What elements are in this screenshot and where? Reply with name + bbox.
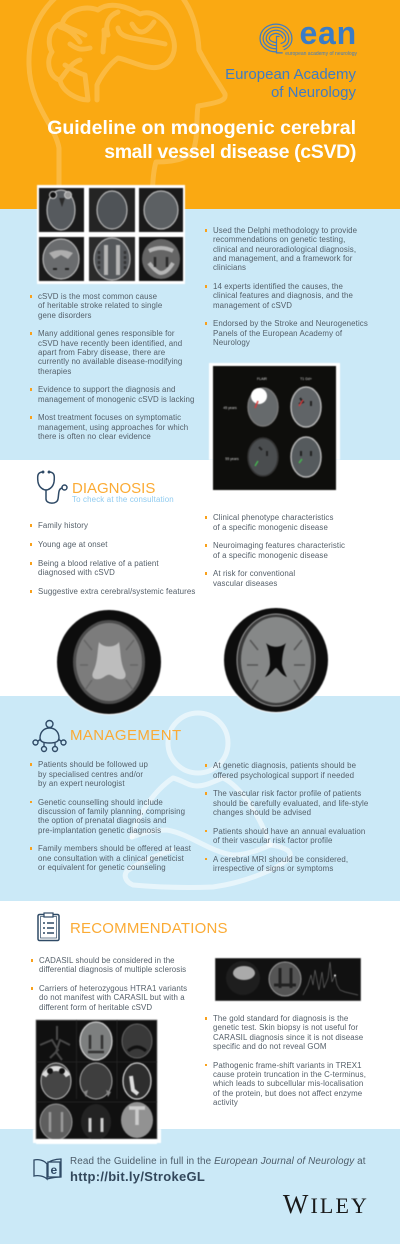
icon: stethoscope bbox=[36, 470, 68, 504]
bullet text: At genetic diagnosis, patients should be bbox=[213, 761, 356, 770]
bullet text: cSVD is the most common cause bbox=[38, 292, 157, 301]
management bullets left bbox=[30, 760, 191, 872]
management band bbox=[0, 696, 400, 901]
bullet text: cause protein truncation in the C-terminus, bbox=[213, 1070, 366, 1079]
bullet text: specific and do not reveal GOM bbox=[213, 1042, 327, 1051]
bullet text: Patients should be followed up bbox=[38, 760, 148, 769]
bullet text: by specialised centres and/or bbox=[38, 770, 143, 779]
bullet text: Most treatment focuses on symptomatic bbox=[38, 413, 181, 422]
image: FLAIR and T1 scans by age: 55 years bbox=[225, 457, 239, 461]
image: nine panel MRI grid bbox=[32, 1019, 162, 1144]
bullet text: irrespective of signs or symptoms bbox=[213, 864, 333, 873]
bullet text bbox=[213, 226, 357, 273]
bullet text: Young age at onset bbox=[38, 540, 108, 549]
bullet text bbox=[213, 1061, 366, 1107]
bullet text bbox=[38, 385, 195, 404]
bullet text: activity bbox=[213, 1098, 238, 1107]
organisation name bbox=[225, 66, 356, 100]
bullet text: Being a blood relative of a patient bbox=[38, 559, 159, 568]
bullet text: by an expert neurologist bbox=[38, 779, 125, 788]
bullet text bbox=[38, 760, 148, 788]
bullet text bbox=[213, 541, 345, 560]
organisation name: European Academy bbox=[225, 66, 356, 83]
icon: open book with e: e bbox=[50, 1163, 58, 1177]
image: FLAIR and T1 scans by age bbox=[208, 362, 340, 491]
bullet text: Suggestive extra cerebral/systemic features bbox=[38, 587, 195, 596]
bullet text: Genetic counselling should include bbox=[38, 798, 163, 807]
bullet text bbox=[38, 329, 182, 376]
logo strapline: european academy of neurology bbox=[285, 51, 357, 57]
bullet text: 14 experts identified the causes, the bbox=[213, 282, 343, 291]
heading text: RECOMMENDATIONS bbox=[70, 920, 228, 936]
bullet text: recommendations on genetic testing, bbox=[213, 235, 345, 244]
heading text: DIAGNOSIS bbox=[72, 480, 155, 497]
bullet text: vascular diseases bbox=[213, 579, 277, 588]
bullet text: there is often no clear evidence bbox=[38, 432, 151, 441]
organisation name: of Neurology bbox=[271, 84, 356, 100]
bullet text: Family history bbox=[38, 521, 88, 530]
bullet text bbox=[213, 282, 353, 310]
bullet text bbox=[38, 292, 162, 320]
bullet text: do not manifest with CARASIL but with a bbox=[39, 993, 185, 1002]
logo: EAN bbox=[259, 15, 357, 57]
heading text: MANAGEMENT bbox=[70, 727, 182, 744]
bullet text bbox=[213, 1014, 363, 1051]
bullet text: which leads to subcellular mis-localisation bbox=[213, 1079, 363, 1088]
bullet text: clinical and neuroradiological diagnosis, bbox=[213, 245, 356, 254]
bullet text bbox=[213, 319, 368, 347]
bullet text: Family members should be offered at least bbox=[38, 844, 191, 853]
footer link bbox=[33, 1156, 366, 1184]
bullet text bbox=[213, 569, 295, 588]
bullet text: At risk for conventional bbox=[213, 569, 295, 578]
image: round T2 scan bbox=[56, 609, 162, 716]
bullet text: genetic test. Skin biopsy is not useful for bbox=[213, 1023, 358, 1032]
image: round FLAIR scan bbox=[223, 607, 329, 714]
bullet text: Endorsed by the Stroke and Neurogenetics bbox=[213, 319, 368, 328]
intro bullets left bbox=[30, 292, 195, 441]
bullet text: Patients should have an annual evaluation bbox=[213, 827, 365, 836]
bullet text: Neuroimaging features characteristic bbox=[213, 541, 345, 550]
intro bullets right bbox=[205, 226, 368, 347]
bullet text: of a specific monogenic disease bbox=[213, 523, 328, 532]
bullet text: of a specific monogenic disease bbox=[213, 551, 328, 560]
image: spectroscopy strip bbox=[214, 957, 362, 1002]
bullet text: diagnosed with cSVD bbox=[38, 568, 115, 577]
image: FLAIR and T1 scans by age: T1 Gd+ bbox=[300, 377, 312, 381]
bullet text bbox=[39, 956, 186, 975]
icon: open book with e bbox=[33, 1158, 62, 1180]
bullet text: Evidence to support the diagnosis and bbox=[38, 385, 176, 394]
recommendations heading bbox=[37, 912, 228, 942]
management heading bbox=[32, 720, 182, 752]
bullet text: differential diagnosis of multiple sclerosis bbox=[39, 965, 186, 974]
title: small vessel disease (cSVD) bbox=[104, 141, 356, 163]
icon: group of people bbox=[32, 720, 67, 752]
bullet text: of their vascular risk factor profile bbox=[213, 836, 332, 845]
bullet text: the option of prenatal diagnosis and bbox=[38, 816, 167, 825]
bullet text: pre-implantation genetic diagnosis bbox=[38, 826, 161, 835]
bullet text bbox=[213, 855, 348, 873]
bullet text: should be carefully evaluated, and life-style bbox=[213, 799, 368, 808]
icon: labyrinth bbox=[259, 24, 292, 54]
bullet text bbox=[39, 984, 187, 1012]
bullet text: or equivalent for genetic counseling bbox=[38, 863, 166, 872]
bullet text bbox=[213, 761, 356, 780]
bullet text: Pathogenic frame-shift variants in TREX1 bbox=[213, 1061, 362, 1070]
bullet text: discussion of family planning, comprising bbox=[38, 807, 185, 816]
bullet text: gene disorders bbox=[38, 311, 92, 320]
bullet text: apart from Fabry disease, there are bbox=[38, 348, 165, 357]
bullet text: and management, and a framework for bbox=[213, 254, 352, 263]
bullet text: Panels of the European Academy of bbox=[213, 329, 342, 338]
image: FLAIR and T1 scans by age: FLAIR bbox=[257, 377, 267, 381]
title bbox=[47, 117, 356, 163]
bullet text: The gold standard for diagnosis is the bbox=[213, 1014, 348, 1023]
bullet text: CADASIL should be considered in the bbox=[39, 956, 175, 965]
bullet text bbox=[213, 513, 334, 532]
bullet text: A cerebral MRI should be considered, bbox=[213, 855, 348, 864]
bullet text: management of monogenic cSVD is lacking bbox=[38, 395, 195, 404]
bullet text: offered psychological support if needed bbox=[213, 771, 354, 780]
URL: http://bit.ly/StrokeGL bbox=[70, 1169, 205, 1184]
watermark: head with brain bbox=[26, 0, 228, 186]
diagnosis bullets left bbox=[30, 521, 195, 596]
bullet text: currently no available disease-modifying bbox=[38, 357, 182, 366]
intro band bbox=[0, 209, 400, 460]
image: FLAIR and T1 scans by age: 45 years bbox=[223, 406, 237, 410]
diagnosis bullets right bbox=[205, 513, 345, 588]
bullet text bbox=[38, 844, 191, 872]
bullet text bbox=[213, 827, 365, 845]
watermark: person bbox=[122, 710, 293, 890]
bullet text: Neurology bbox=[213, 338, 250, 347]
bullet text: Many additional genes responsible for bbox=[38, 329, 175, 338]
bullet text: therapies bbox=[38, 367, 71, 376]
icon: clipboard bbox=[37, 912, 60, 942]
bullet text bbox=[38, 559, 159, 578]
image: six brain MRI scans bbox=[36, 184, 186, 284]
subheading: To check at the consultation bbox=[72, 495, 174, 504]
bullet text bbox=[38, 798, 185, 835]
bullet text bbox=[213, 789, 368, 817]
footer band bbox=[0, 1129, 400, 1244]
bullet text: Carriers of heterozygous HTRA1 variants bbox=[39, 984, 187, 993]
logo wordmark: ean bbox=[299, 15, 357, 51]
title: Guideline on monogenic cerebral bbox=[47, 117, 356, 139]
bullet text: clinical features and diagnosis, and the bbox=[213, 291, 353, 300]
bullet text: Clinical phenotype characteristics bbox=[213, 513, 334, 522]
recommendation bullets right bbox=[205, 1014, 366, 1107]
header band bbox=[0, 0, 400, 209]
bullet text: Used the Delphi methodology to provide bbox=[213, 226, 357, 235]
bullet text: The vascular risk factor profile of patients bbox=[213, 789, 361, 798]
bullet text: different form of heritable cSVD bbox=[39, 1003, 152, 1012]
bullet text: clinicians bbox=[213, 263, 246, 272]
bullet text: cSVD have recently been identified, and bbox=[38, 339, 182, 348]
bullet text: one consultation with a clinical geneticist bbox=[38, 854, 184, 863]
bullet text: CARASIL diagnosis since it is not disease bbox=[213, 1033, 363, 1042]
bullet text bbox=[38, 413, 188, 441]
management bullets right bbox=[205, 761, 368, 873]
publisher logo: Wiley: WILEY bbox=[283, 1189, 369, 1219]
bullet text: changes should be advised bbox=[213, 808, 311, 817]
bullet text: of the protein, but does not affect enzyme bbox=[213, 1089, 362, 1098]
diagnosis heading bbox=[36, 470, 174, 504]
bullet text: management, using approaches for which bbox=[38, 423, 188, 432]
recommendation bullets left bbox=[31, 956, 187, 1012]
reference line: Read the Guideline in full in the European Journal of Neurology at bbox=[70, 1156, 366, 1167]
bullet text: management of cSVD bbox=[213, 301, 292, 310]
bullet text: of heritable stroke related to single bbox=[38, 301, 162, 310]
